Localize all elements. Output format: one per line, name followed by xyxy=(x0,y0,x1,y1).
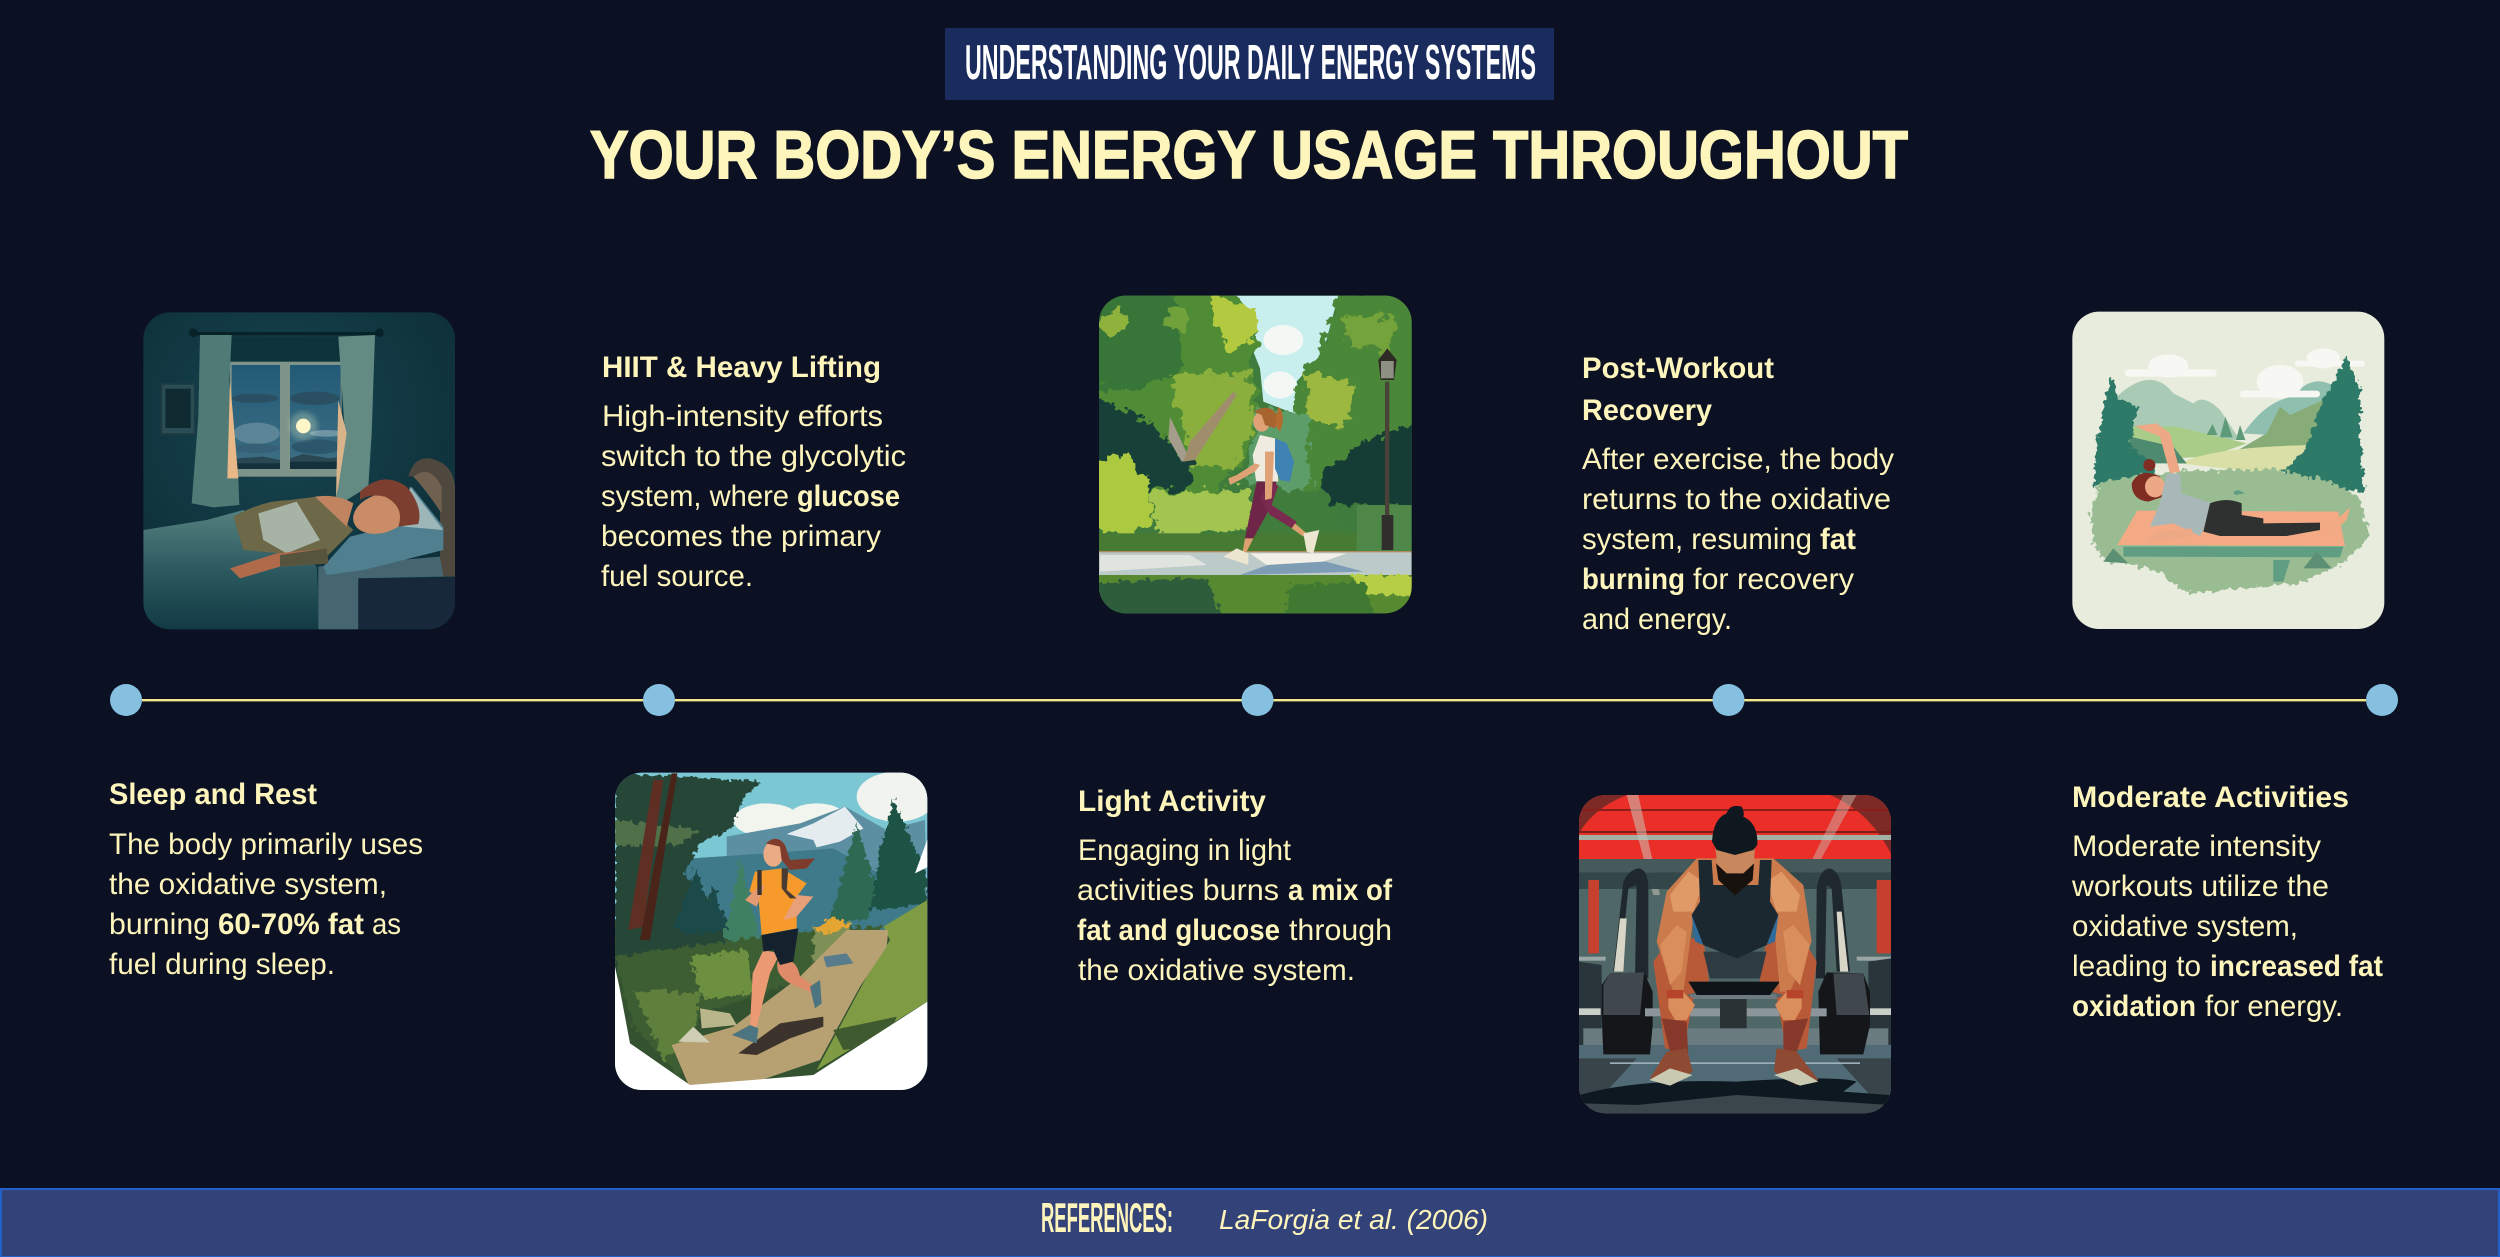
text: post-workout body: returns to the oxidative xyxy=(1582,483,1891,516)
text: sleep and rest body: burning xyxy=(109,908,210,941)
text: moderate activities body: Moderate intensity xyxy=(2072,830,2321,863)
panel: HIIT and heavy lifting xyxy=(600,351,940,1100)
text: HIIT body: system, where xyxy=(601,480,789,513)
text: HIIT body: High-intensity efforts xyxy=(602,400,883,433)
illustration: person sleeping by moonlit window xyxy=(143,312,455,630)
text: sleep and rest body: fuel during sleep. xyxy=(109,948,335,981)
text: light activity body xyxy=(1077,834,1393,987)
text: post-workout body: system, resuming xyxy=(1582,523,1812,556)
text: light activity body: the oxidative system. xyxy=(1078,954,1355,987)
text: HIIT body: becomes the primary xyxy=(601,520,881,553)
text: sleep and rest body: The body primarily uses xyxy=(109,828,423,861)
footer: references bar: REFERENCES: xyxy=(1041,1194,1173,1241)
text: moderate activities body: increased fat xyxy=(2210,950,2383,983)
panel: light activity xyxy=(1077,285,1430,987)
text: post-workout body: fat xyxy=(1820,523,1856,556)
panel: sleep and rest xyxy=(109,300,470,981)
text: moderate activities body: leading to xyxy=(2072,950,2201,983)
text: HIIT body: fuel source. xyxy=(601,560,753,593)
text: post-workout body xyxy=(1582,443,1894,636)
text: light activity body: fat and glucose xyxy=(1077,914,1280,947)
text: light activity body: through xyxy=(1289,914,1392,947)
footer: references bar xyxy=(1,1189,2499,1257)
panel: post-workout recovery xyxy=(1570,352,1910,1125)
barbell xyxy=(1602,972,1653,1054)
text: post-workout body: for recovery xyxy=(1693,563,1854,596)
header banner xyxy=(945,28,1554,100)
text: sleep and rest body xyxy=(109,828,423,981)
heading: post-workout recovery xyxy=(1582,352,1774,427)
text: moderate activities body: oxidative system, xyxy=(2072,910,2298,943)
text: moderate activities body: for energy. xyxy=(2205,990,2343,1023)
text: moderate activities body: workouts utilize the xyxy=(2071,870,2329,903)
text: UNDERSTANDING YOUR DAILY ENERGY SYSTEMS xyxy=(965,36,1536,90)
text: moderate activities body xyxy=(2071,830,2383,1023)
text: light activity body: a mix of xyxy=(1288,874,1393,907)
heading: post-workout recovery: Recovery xyxy=(1582,394,1712,427)
text: post-workout body: burning xyxy=(1582,563,1685,596)
heading: light activity: Light Activity xyxy=(1078,785,1266,818)
text: post-workout body: After exercise, the body xyxy=(1582,443,1894,476)
text: light activity body: activities burns xyxy=(1077,874,1279,907)
walker xyxy=(1245,482,1277,538)
lifter xyxy=(1653,938,1710,1052)
panel: moderate activities xyxy=(2060,300,2400,1023)
runner xyxy=(777,960,812,992)
title: YOUR BODY’S ENERGY USAGE THROUGHOUT xyxy=(590,117,1908,193)
footer: references bar: LaForgia et al. (2006) xyxy=(1219,1204,1488,1235)
illustration: muscular man deadlifting in gym xyxy=(1579,795,1891,1114)
heading: HIIT and heavy lifting: HIIT & Heavy Lifting xyxy=(602,351,881,384)
text: sleep and rest body: the oxidative system, xyxy=(109,868,387,901)
text: moderate activities body: oxidation xyxy=(2072,990,2196,1023)
text: HIIT body: glucose xyxy=(797,480,900,513)
timeline xyxy=(110,684,2398,716)
text: sleep and rest body: as xyxy=(372,908,401,941)
text: HIIT body xyxy=(601,400,906,593)
text: post-workout body: and energy. xyxy=(1582,603,1732,636)
illustration: woman trail running in mountains xyxy=(615,772,928,1090)
text: sleep and rest body: 60-70% fat xyxy=(218,908,364,941)
heading: post-workout recovery: Post-Workout xyxy=(1582,352,1774,385)
illustration: woman walking in a green park xyxy=(1099,296,1412,614)
text: HIIT body: switch to the glycolytic xyxy=(601,440,906,473)
illustration: woman stretching on mat in meadow xyxy=(2072,312,2384,629)
heading: sleep and rest: Sleep and Rest xyxy=(109,778,317,811)
heading: moderate activities: Moderate Activities xyxy=(2072,781,2349,814)
text: light activity body: Engaging in light xyxy=(1078,834,1292,867)
